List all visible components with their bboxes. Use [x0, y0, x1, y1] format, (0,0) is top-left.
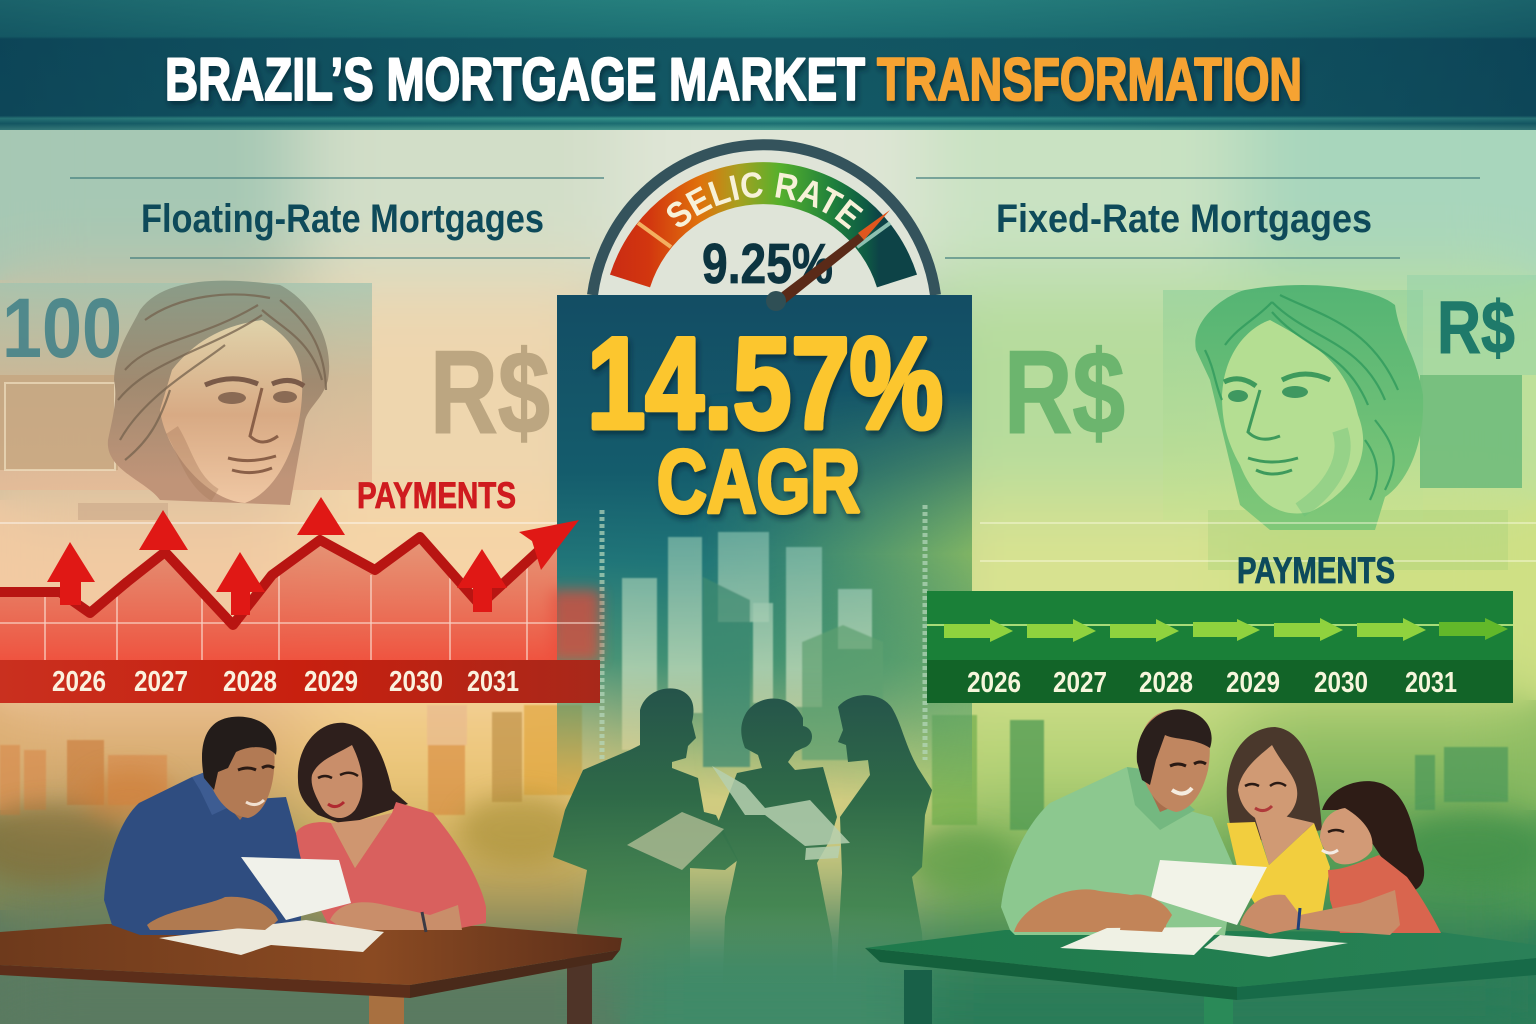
floating-rate payments chart: 2026	[52, 666, 106, 698]
fixed-rate banknote	[1163, 275, 1536, 570]
fixed-rate payments chart: 2027	[1053, 667, 1107, 699]
heading rules	[70, 178, 1480, 258]
man	[104, 717, 304, 935]
year bar	[0, 660, 600, 703]
daughter	[1320, 781, 1441, 933]
banknote currency mark: R$	[1437, 286, 1515, 369]
floating-rate payments chart: 2031	[467, 666, 519, 698]
floating-rate payments chart: 2030	[389, 666, 443, 698]
floating-rate payments chart: 2029	[304, 666, 358, 698]
dotted edge strips	[602, 505, 925, 760]
banknote value: 100	[2, 281, 122, 375]
woman	[296, 723, 486, 932]
payments label: PAYMENTS	[1237, 550, 1395, 591]
gauge value: 9.25%	[702, 232, 833, 296]
header band	[0, 0, 1536, 130]
portrait: right banknote face	[1195, 285, 1423, 530]
trend arrowhead	[519, 520, 579, 570]
father	[1001, 709, 1235, 935]
silhouette: woman center	[717, 698, 837, 1000]
up arrows	[47, 497, 507, 615]
white guide lines	[980, 523, 1536, 561]
Selic rate gauge	[587, 139, 941, 296]
CAGR figure	[587, 310, 943, 531]
mother	[1227, 727, 1330, 915]
title: TRANSFORMATION	[877, 46, 1302, 113]
floating-rate payments chart: 2027	[134, 666, 188, 698]
heading: fixed-rate: Fixed-Rate Mortgages	[996, 197, 1372, 241]
papers	[627, 766, 850, 870]
gauge label: SELIC RATE	[666, 172, 864, 230]
center silhouettes	[553, 688, 932, 1000]
payments label: PAYMENTS	[357, 475, 516, 516]
floating-rate payments chart	[0, 475, 600, 703]
flat arrows	[944, 618, 1508, 642]
documents	[1060, 927, 1222, 955]
documents	[159, 920, 384, 955]
table: right	[865, 930, 1536, 1024]
table: left	[0, 924, 622, 1024]
heading: floating-rate: Floating-Rate Mortgages	[141, 197, 544, 241]
silhouette: man	[553, 688, 738, 1000]
couple: left	[104, 717, 486, 955]
title: BRAZIL’S MORTGAGE MARKET	[165, 46, 865, 113]
portrait: left banknote face	[108, 281, 329, 505]
floating-rate payments chart: 2028	[223, 666, 277, 698]
watermark: right R$: R$	[1004, 327, 1125, 459]
fixed-rate payments chart: 2026	[967, 667, 1021, 699]
fixed-rate payments chart: 2028	[1139, 667, 1193, 699]
fixed-rate payments chart: 2029	[1226, 667, 1280, 699]
fixed-rate payments chart: 2031	[1405, 667, 1457, 699]
gauge needle	[766, 210, 890, 311]
skyline left	[0, 705, 582, 885]
CAGR figure: 14.57%	[587, 310, 943, 456]
fixed-rate payments chart: 2030	[1314, 667, 1368, 699]
floating-rate banknote	[0, 281, 372, 520]
CAGR figure: CAGR	[657, 431, 860, 531]
fixed-rate payments chart	[927, 550, 1513, 703]
family: right	[1001, 709, 1441, 957]
skyline right	[905, 715, 1536, 892]
center skyline	[622, 532, 883, 767]
watermark: left R$: R$	[430, 327, 550, 459]
center panel	[557, 295, 972, 800]
silhouette: woman right	[835, 695, 932, 1000]
